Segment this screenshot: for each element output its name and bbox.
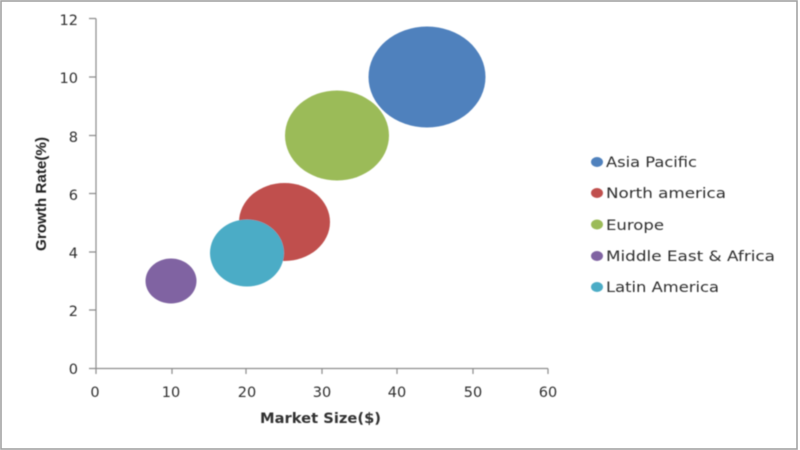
- x axis tick labels: 20: [238, 385, 256, 401]
- x axis tick labels: 30: [313, 385, 331, 401]
- y axis tick labels: 4: [69, 246, 78, 262]
- x axis tick labels: 50: [464, 385, 482, 401]
- bubble: Asia Pacific: [368, 26, 486, 128]
- x axis title: Market Size($): [260, 411, 381, 427]
- x axis tick labels: 40: [388, 385, 406, 401]
- axes: [89, 18, 548, 374]
- bubble: Latin America: [210, 220, 284, 286]
- y axis tick labels: 8: [69, 130, 78, 146]
- legend item: Asia Pacific: Asia Pacific: [606, 155, 697, 171]
- y axis title: Growth Rate(%): [34, 137, 50, 251]
- bubble: Europe: [285, 90, 389, 180]
- legend item: North america: North america: [606, 186, 726, 202]
- y axis tick labels: [60, 13, 78, 378]
- y axis tick labels: 12: [60, 13, 78, 29]
- legend item: Europe: [591, 218, 664, 234]
- x axis tick labels: 0: [90, 385, 100, 401]
- y axis tick labels: 10: [60, 71, 78, 87]
- y axis tick labels: 0: [69, 362, 78, 378]
- y axis tick labels: 6: [69, 188, 78, 204]
- y axis tick labels: 2: [69, 304, 78, 320]
- legend item: Latin America: Latin America: [606, 280, 719, 296]
- legend item: Middle East & Africa: Middle East & Africa: [606, 249, 775, 265]
- legend: [591, 155, 775, 296]
- legend item: Europe: Europe: [606, 218, 664, 234]
- x axis tick labels: 10: [162, 385, 180, 401]
- bubble: Middle East & Africa: [146, 258, 196, 304]
- x axis tick labels: 60: [539, 385, 557, 401]
- x axis tick labels: [90, 385, 557, 401]
- bubble: North america: [239, 183, 330, 261]
